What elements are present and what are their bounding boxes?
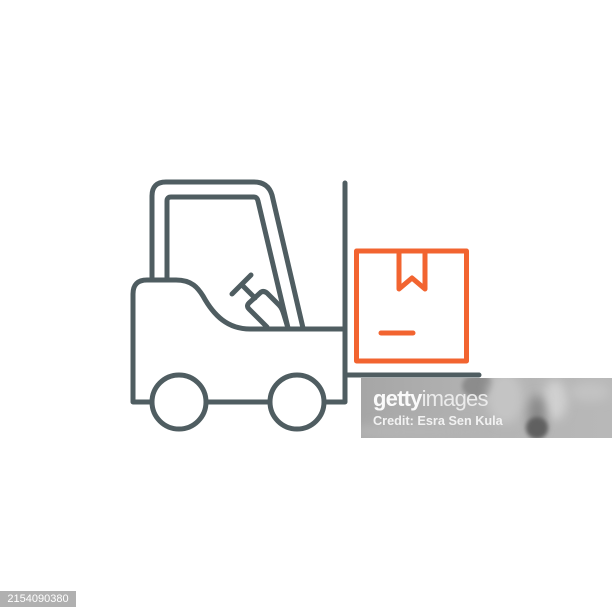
cab outer frame (152, 182, 303, 328)
left wheel (152, 375, 206, 429)
mast (326, 183, 345, 402)
watermark credit: Credit: Esra Sen Kula (373, 414, 503, 428)
forklift truck (133, 182, 479, 429)
fork (345, 372, 479, 378)
box label line (381, 330, 413, 336)
cab inner frame (167, 197, 288, 328)
chassis between wheels (207, 400, 269, 404)
watermark band (361, 378, 612, 438)
box (356, 251, 466, 361)
box tape (399, 252, 425, 289)
image id tag (0, 591, 76, 607)
driver seat (248, 292, 288, 328)
right wheel (270, 375, 324, 429)
box outline (356, 251, 466, 361)
steering wheel (232, 275, 255, 298)
image id tag: 2154090380 (7, 593, 69, 605)
forklift illustration (130, 180, 612, 438)
watermark logo: gettyimages (373, 386, 488, 411)
body (133, 280, 345, 402)
